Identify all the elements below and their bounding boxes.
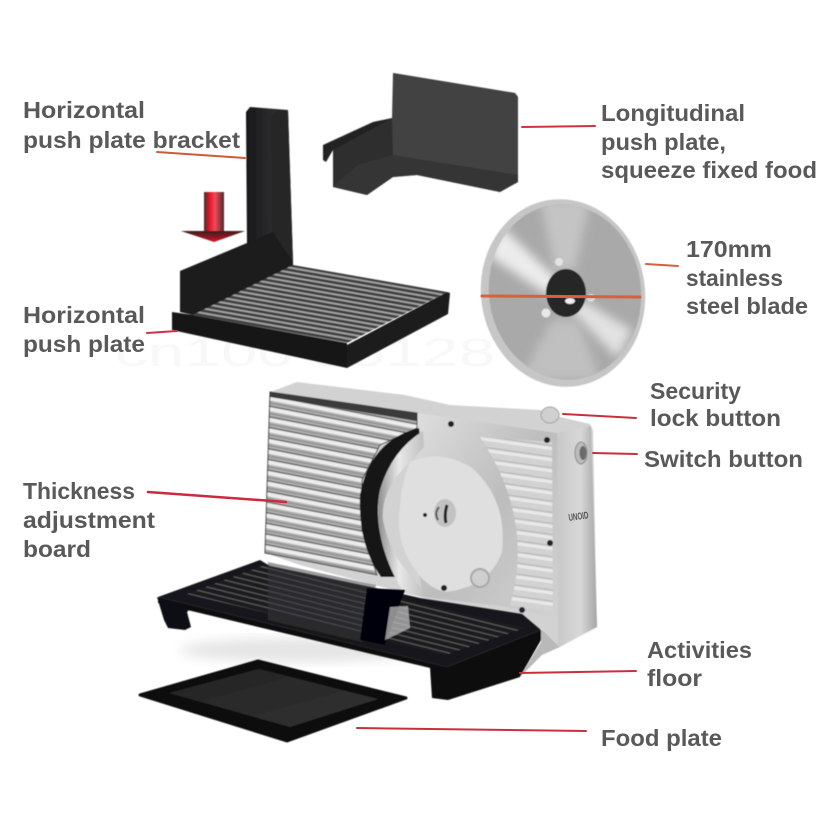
screws: [423, 421, 553, 613]
red leader lines: [147, 126, 678, 731]
base top: [158, 560, 541, 667]
bracket upright: [246, 107, 293, 262]
label: longitudinal push plate: squeeze fixed food: [601, 157, 817, 183]
knob: [471, 569, 489, 587]
thickness board: [265, 392, 417, 575]
label: blade: stainless: [686, 265, 783, 291]
side rib area: [480, 437, 553, 612]
security lock button: [541, 407, 559, 423]
label: activities floor: Activities: [647, 637, 752, 663]
label: blade: steel blade: [686, 293, 808, 319]
right side panel: [557, 426, 597, 647]
plate front lip: [172, 312, 347, 368]
longitudinal push plate: [323, 73, 518, 195]
leader: food plate: [357, 728, 586, 731]
blade hub: [546, 269, 586, 317]
label: food plate: Food plate: [601, 725, 722, 751]
label: horizontal push plate: Horizontal: [23, 302, 145, 328]
label: horizontal push plate: [23, 302, 145, 357]
leader: security lock button: [563, 414, 636, 418]
machine shadow: [180, 638, 420, 662]
label: security lock button: lock button: [650, 405, 781, 431]
base reflection: [268, 562, 376, 642]
label: horizontal push plate bracket: Horizontal: [23, 97, 145, 123]
label: activities floor: [647, 637, 752, 691]
leader: blade: [646, 264, 678, 266]
label: horizontal push plate bracket: [23, 97, 240, 153]
label: longitudinal push plate: push plate,: [601, 129, 726, 155]
label: blade: 170mm: [686, 236, 772, 262]
leader: thickness adjustment board: [148, 492, 286, 502]
leader: activities floor: [520, 671, 636, 673]
right leg: [430, 630, 541, 700]
label: longitudinal push plate: [601, 100, 817, 183]
leader: longitudinal push plate: [522, 126, 595, 127]
black arc gasket: [360, 428, 420, 577]
inner blade plate: [399, 456, 503, 592]
food plate: [140, 661, 406, 741]
label: blade: [686, 236, 808, 319]
leader: switch button: [593, 453, 637, 454]
bracket lower wall: [180, 232, 293, 315]
circular stainless steel blade: [480, 198, 646, 388]
plate right lip: [347, 292, 450, 368]
label: security lock button: Security: [650, 378, 741, 404]
leader: horizontal push plate bracket: [157, 152, 245, 158]
left foot: [157, 597, 191, 630]
horizontal push plate with bracket: [172, 107, 450, 368]
label: thickness adjustment board: [23, 478, 155, 562]
machine body: [265, 382, 597, 647]
watermark: cn100 35128: [115, 331, 495, 375]
label: switch button: Switch button: [644, 446, 803, 472]
label: horizontal push plate: push plate: [23, 331, 145, 357]
slicer machine: [157, 382, 597, 700]
blade guard face: [417, 413, 558, 618]
label: horizontal push plate bracket: push plate bracket: [23, 127, 240, 153]
label: longitudinal push plate: Longitudinal: [601, 100, 745, 126]
label: activities floor: floor: [647, 665, 702, 691]
switch button: [575, 442, 587, 464]
brand label: UNOID: [568, 510, 589, 524]
silver guard crescent: [378, 431, 424, 597]
leader: horizontal push plate: [147, 331, 177, 333]
label: thickness adjustment board: adjustment: [23, 507, 155, 533]
icon: red down arrow: [181, 192, 245, 242]
base front edge: [158, 597, 447, 672]
centre hub: [434, 499, 456, 527]
blade sheen: [488, 200, 632, 380]
label: thickness adjustment board: board: [23, 536, 91, 562]
label: thickness adjustment board: Thickness: [23, 478, 135, 504]
label: security lock button: [650, 378, 781, 431]
ribbed floor: [193, 265, 447, 343]
leader: blade crossing: [482, 296, 640, 297]
